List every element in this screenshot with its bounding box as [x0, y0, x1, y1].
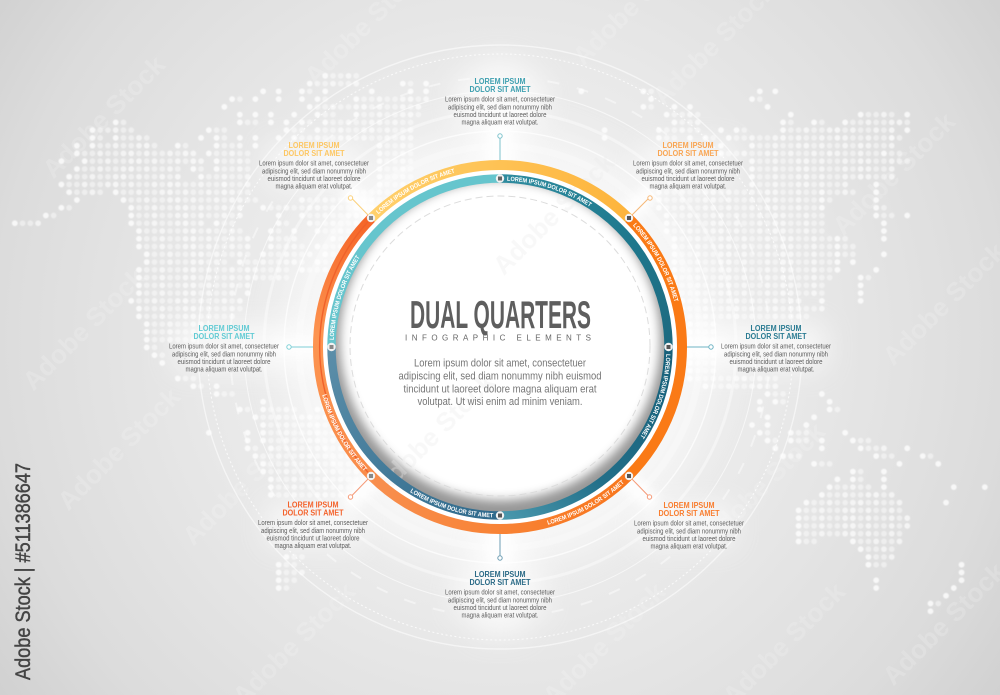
text block: lower right: DOLOR SIT AMET: [659, 508, 720, 518]
text block: bottom: DOLOR SIT AMET: [470, 577, 531, 587]
faint inner watermarks: [367, 146, 621, 500]
text block: lower right: euismod tincidunt ut laoreet dolore: [642, 536, 736, 543]
text block: left: Lorem ipsum dolor sit amet, consectetuer: [169, 344, 280, 351]
ring markers: [327, 174, 673, 520]
text block: bottom: magna aliquam erat volutpat.: [462, 613, 539, 620]
text block: bottom: [445, 569, 556, 620]
text block: lower left: adipiscing elit, sed diam nonummy nibh: [261, 528, 365, 535]
text block: upper right: adipiscing elit, sed diam nonummy nibh: [636, 168, 740, 175]
text block: bottom: euismod tincidunt ut laoreet dolore: [454, 605, 547, 612]
leader: right: [668, 345, 713, 349]
text block: left: euismod tincidunt ut laoreet dolore: [178, 359, 271, 366]
text block: right: Lorem ipsum dolor sit amet, consectetuer: [721, 344, 832, 351]
leader: left: [287, 345, 332, 349]
text block: bottom: Lorem ipsum dolor sit amet, consectetuer: [445, 590, 556, 597]
text block: upper right: [633, 140, 744, 191]
text block: right: [721, 323, 832, 374]
dotted world map: [15, 76, 986, 611]
ring labels: LOREM IPSUM DOLOR SIT AMET: [507, 176, 592, 206]
leader: top: [498, 134, 502, 178]
stock watermarks: Adobe Stock: [696, 416, 831, 551]
stock watermarks: Adobe Stock: [36, 49, 171, 184]
text block: right: magna aliquam erat volutpat.: [738, 367, 815, 374]
text block: top: adipiscing elit, sed diam nonummy nibh: [448, 104, 552, 111]
text block: left: adipiscing elit, sed diam nonummy nibh: [172, 351, 276, 358]
text block: lower left: [258, 500, 369, 550]
text block: left: LOREM IPSUM: [198, 323, 250, 333]
dashed circle: [350, 196, 650, 496]
text block: right: adipiscing elit, sed diam nonummy nibh: [724, 351, 828, 358]
concentric tech circles: [198, 45, 802, 649]
text block: lower right: Lorem ipsum dolor sit amet, consectetuer: [634, 521, 745, 528]
text block: upper right: magna aliquam erat volutpat.: [650, 184, 727, 191]
text block: lower left: Lorem ipsum dolor sit amet, consectetuer: [258, 520, 369, 527]
text block: lower right: [634, 500, 745, 551]
text block: right: euismod tincidunt ut laoreet dolore: [730, 359, 823, 366]
text block: lower right: adipiscing elit, sed diam nonummy nibh: [637, 528, 741, 535]
inner shadow: [334, 180, 666, 513]
text block: left: magna aliquam erat volutpat.: [186, 367, 263, 374]
subtitle: INFOGRAPHIC ELEMENTS: [405, 334, 591, 342]
light glows and rays: [175, 60, 825, 635]
text block: upper right: DOLOR SIT AMET: [658, 148, 719, 158]
vertical stock credit: Adobe Stock | #511386647: [12, 463, 35, 680]
text block: upper left: Lorem ipsum dolor sit amet, consectetuer: [259, 161, 370, 168]
text block: upper right: Lorem ipsum dolor sit amet, consectetuer: [633, 161, 744, 168]
text block: top: Lorem ipsum dolor sit amet, consectetuer: [445, 97, 556, 104]
ring labels: LOREM IPSUM DOLOR SIT AMET: [330, 254, 360, 340]
leader: bottom: [498, 516, 502, 560]
text block: left: DOLOR SIT AMET: [194, 331, 255, 341]
center paragraph: adipiscing elit, sed diam nonummy nibh euismod: [398, 370, 602, 382]
faint inner watermarks: Adobe Stock: [487, 146, 621, 280]
ring labels: [322, 168, 678, 525]
center paragraph: [398, 358, 602, 408]
text block: top: DOLOR SIT AMET: [470, 84, 531, 94]
text block: upper left: [259, 140, 370, 191]
text block: bottom: LOREM IPSUM: [474, 569, 526, 579]
stock watermarks: Adobe Stock: [51, 381, 186, 516]
ring labels: LOREM IPSUM DOLOR SIT AMET: [633, 222, 678, 301]
text block: top: [445, 76, 556, 127]
ring labels: LOREM IPSUM DOLOR SIT AMET: [376, 168, 454, 214]
title: DUAL QUARTERS: [410, 294, 591, 337]
text block: upper right: LOREM IPSUM: [662, 140, 714, 150]
center paragraph: tincidunt ut laoreet dolore magna aliquam erat: [404, 384, 596, 396]
leader lines: [287, 134, 713, 560]
stock watermarks: Adobe Stock: [826, 106, 961, 241]
text block: lower left: LOREM IPSUM: [288, 500, 338, 510]
outer ring: [318, 165, 682, 529]
text block: top: LOREM IPSUM: [474, 76, 526, 86]
text block: lower right: LOREM IPSUM: [664, 500, 714, 510]
leader: lower left: [348, 477, 370, 499]
text block: upper left: adipiscing elit, sed diam nonummy nibh: [262, 168, 366, 175]
text block: top: euismod tincidunt ut laoreet dolore: [454, 112, 547, 119]
text block: lower right: magna aliquam erat volutpat.: [650, 544, 728, 551]
central dual ring: [313, 146, 687, 534]
text block: right: DOLOR SIT AMET: [746, 331, 807, 341]
white disc between rings: [316, 163, 684, 531]
text block: right: LOREM IPSUM: [750, 323, 802, 333]
text block: lower left: euismod tincidunt ut laoreet dolore: [266, 536, 360, 542]
ring labels: LOREM IPSUM DOLOR SIT AMET: [322, 394, 368, 470]
text block: top: magna aliquam erat volutpat.: [462, 120, 539, 127]
ring labels: LOREM IPSUM DOLOR SIT AMET: [547, 480, 624, 525]
center paragraph: Lorem ipsum dolor sit amet, consectetuer: [414, 358, 586, 370]
leader: upper right: [630, 196, 652, 217]
text block: upper right: euismod tincidunt ut laoreet dolore: [642, 176, 735, 183]
text block: lower left: magna aliquam erat volutpat.: [274, 543, 352, 550]
ring labels: LOREM IPSUM DOLOR SIT AMET: [640, 354, 670, 440]
text block: left: [169, 323, 280, 374]
text block: upper left: euismod tincidunt ut laoreet dolore: [268, 176, 361, 183]
text block: bottom: adipiscing elit, sed diam nonummy nibh: [448, 597, 552, 604]
text block: upper left: LOREM IPSUM: [288, 140, 340, 150]
stock watermarks: Adobe Stock: [16, 261, 151, 396]
text block: upper left: DOLOR SIT AMET: [284, 148, 345, 158]
stock watermarks: Adobe Stock: [176, 416, 311, 551]
leader: lower right: [630, 477, 652, 499]
ring labels: LOREM IPSUM DOLOR SIT AMET: [410, 488, 494, 518]
text block: upper left: magna aliquam erat volutpat.: [276, 184, 353, 191]
leader: upper left: [348, 196, 370, 217]
text block: lower left: DOLOR SIT AMET: [283, 508, 344, 518]
faint inner watermarks: Adobe Stock: [367, 366, 501, 500]
inner ring: [332, 178, 668, 516]
center paragraph: volutpat. Ut wisi enim ad minim veniam.: [418, 396, 582, 408]
